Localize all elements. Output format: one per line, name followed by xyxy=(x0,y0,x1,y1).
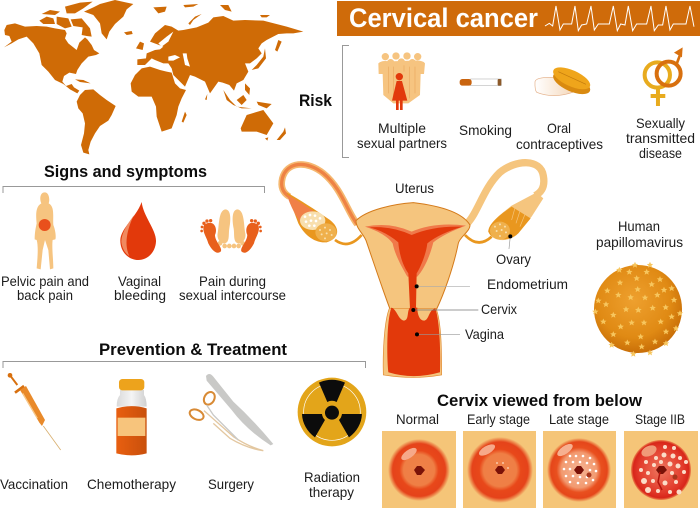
icon: body with pelvic pain xyxy=(35,192,56,269)
icon: chemotherapy bottle xyxy=(116,379,147,455)
title banner xyxy=(337,1,700,36)
heading: signs and symptoms: Signs and symptoms xyxy=(44,163,207,181)
label: vaginal bleeding xyxy=(114,273,166,303)
label: oral contraceptives: Oral xyxy=(547,120,571,136)
icon: multiple partners xyxy=(378,52,425,110)
icon: surgical tools xyxy=(188,374,273,451)
label: pain during sexual intercourse: sexual intercourse xyxy=(179,287,286,303)
panel: human papillomavirus xyxy=(592,218,683,357)
vagina xyxy=(383,308,442,377)
right fallopian tube and ovary xyxy=(465,163,544,242)
diagram: uterus anatomy xyxy=(282,163,568,377)
icon: gender symbols xyxy=(645,47,683,106)
heading: cervix viewed from below: Cervix viewed from below xyxy=(437,392,642,410)
tile: stage IIB cervix xyxy=(624,431,698,508)
endometrium xyxy=(365,225,466,308)
label: endometrium: Endometrium xyxy=(487,276,568,292)
panel: prevention and treatment xyxy=(0,341,366,500)
pointers xyxy=(411,234,512,336)
label: ovary: Ovary xyxy=(496,251,531,267)
icon: syringe xyxy=(8,373,61,450)
label: multiple sexual partners: sexual partners xyxy=(357,135,447,151)
label: sexually transmitted disease: transmitted xyxy=(626,130,695,146)
label: oral contraceptives: contraceptives xyxy=(516,136,603,152)
label: late stage: Late stage xyxy=(549,411,609,427)
label: human papillomavirus xyxy=(596,218,683,250)
panel: cervix viewed from below xyxy=(382,392,698,508)
label: pain during sexual intercourse: Pain during xyxy=(199,273,266,289)
label: oral contraceptives xyxy=(516,120,603,152)
icon: feet xyxy=(200,209,262,253)
label: surgery: Surgery xyxy=(208,476,254,492)
label: vaginal bleeding: bleeding xyxy=(114,287,166,303)
tile: early stage cervix xyxy=(463,431,536,508)
icon: radiation symbol xyxy=(298,378,366,446)
label: radiation therapy xyxy=(304,469,360,500)
left fallopian tube and ovary xyxy=(282,164,362,244)
label: chemotherapy: Chemotherapy xyxy=(87,476,176,492)
heading: prevention and treatment: Prevention & Treatment xyxy=(99,341,288,359)
label: uterus: Uterus xyxy=(395,180,434,196)
label: pain during sexual intercourse xyxy=(179,273,286,303)
label: smoking: Smoking xyxy=(459,122,512,138)
label: sexually transmitted disease xyxy=(626,115,695,161)
world map xyxy=(4,0,303,154)
label: vaccination: Vaccination xyxy=(0,476,68,492)
icon: blood drop xyxy=(120,202,156,260)
label: pelvic pain and back pain: Pelvic pain and xyxy=(1,273,89,289)
title banner: Cervical cancer xyxy=(349,3,538,33)
label: sexually transmitted disease: Sexually xyxy=(636,115,685,131)
panel: signs and symptoms xyxy=(1,163,286,303)
tile: normal cervix xyxy=(382,431,456,508)
uterus body xyxy=(356,203,470,309)
label: radiation therapy: Radiation xyxy=(304,469,360,485)
label: normal: Normal xyxy=(396,411,439,427)
icon: virus sphere xyxy=(592,262,683,357)
label: multiple sexual partners: Multiple xyxy=(378,120,426,136)
label: human papillomavirus: papillomavirus xyxy=(596,234,683,250)
heading: risk: Risk xyxy=(299,92,333,110)
icon: cigarette xyxy=(460,79,501,86)
label: vagina: Vagina xyxy=(465,326,504,342)
icon: oral contraceptives xyxy=(535,63,593,99)
label: early stage: Early stage xyxy=(467,411,530,427)
label: pelvic pain and back pain: back pain xyxy=(17,287,73,303)
panel: risk factors xyxy=(342,46,695,161)
label: cervix: Cervix xyxy=(481,301,517,317)
label: stage IIB: Stage IIB xyxy=(635,411,685,427)
label: sexually transmitted disease: disease xyxy=(639,145,682,161)
label: multiple sexual partners xyxy=(357,120,447,151)
label: radiation therapy: therapy xyxy=(309,484,354,500)
label: human papillomavirus: Human xyxy=(618,218,660,234)
label: vaginal bleeding: Vaginal xyxy=(118,273,161,289)
tile: late stage cervix xyxy=(543,431,616,508)
label: pelvic pain and back pain xyxy=(1,273,89,303)
